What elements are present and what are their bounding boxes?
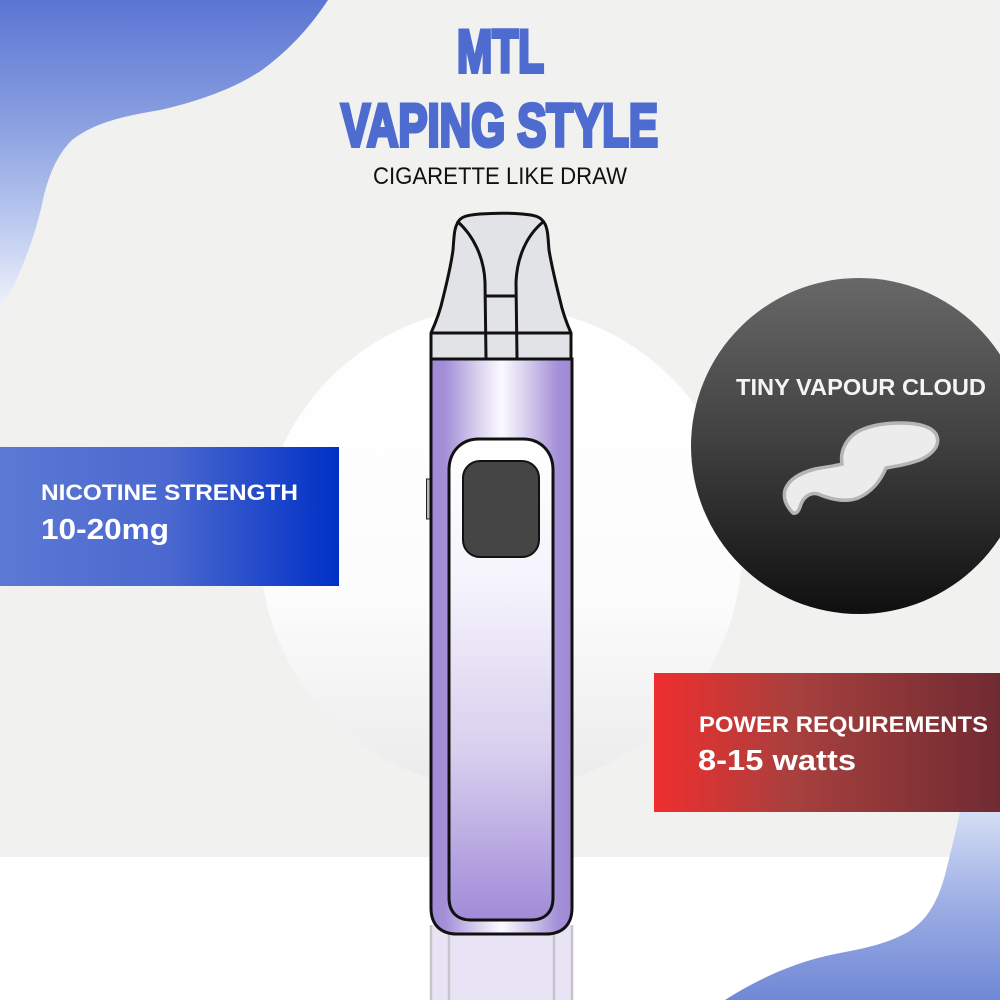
icon: vapour cloud bbox=[784, 423, 938, 513]
panel: nicotine strength bbox=[0, 447, 339, 586]
title: MTL bbox=[457, 18, 544, 85]
central white circle bbox=[260, 307, 742, 789]
device body bbox=[431, 359, 572, 934]
title bbox=[341, 18, 658, 159]
screen bbox=[463, 461, 539, 557]
subtitle: CIGARETTE LIKE DRAW bbox=[373, 163, 627, 190]
side button bbox=[426, 479, 430, 519]
device: vape pod bbox=[426, 213, 572, 1000]
device lower section bbox=[431, 925, 572, 1000]
mouthpiece bbox=[431, 213, 571, 359]
bottom-right blue wave bbox=[725, 812, 1000, 1000]
top-left blue wave bbox=[0, 0, 328, 312]
front panel bbox=[449, 439, 553, 920]
panel: nicotine strength: NICOTINE STRENGTH bbox=[41, 480, 298, 505]
panel: tiny vapour cloud bbox=[691, 278, 1000, 614]
panel: nicotine strength: 10-20mg bbox=[41, 514, 169, 546]
title: VAPING STYLE bbox=[341, 92, 658, 159]
panel: tiny vapour cloud: TINY VAPOUR CLOUD bbox=[736, 374, 986, 400]
panel: power requirements: 8-15 watts bbox=[698, 745, 856, 777]
panel: power requirements bbox=[654, 673, 1000, 812]
panel: power requirements: POWER REQUIREMENTS bbox=[699, 712, 988, 737]
